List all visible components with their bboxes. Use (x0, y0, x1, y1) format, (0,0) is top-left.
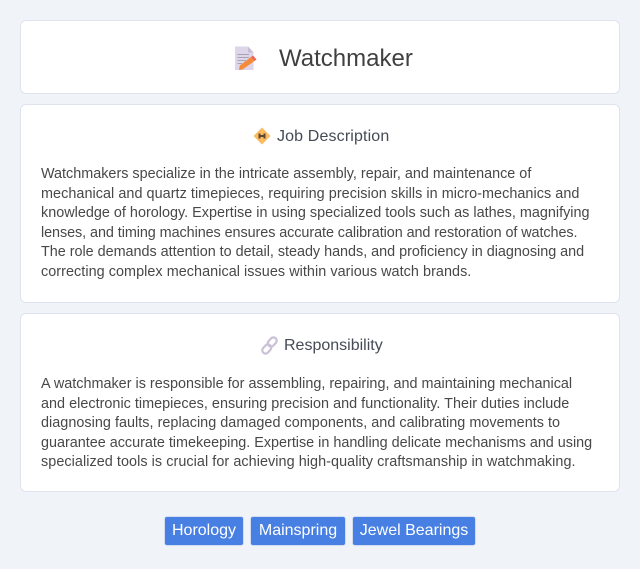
tag: Jewel Bearings: Jewel Bearings (360, 522, 468, 539)
icon: document with pencil (235, 46, 256, 70)
panel: job description (20, 104, 620, 303)
icon: diamond sign (254, 128, 270, 144)
text: job description: Watchmakers specialize in the intricate assembly, repair, and maintenance of (41, 166, 531, 182)
text: job description: knowledge of horology. Expertise in using specialized tools such as lathes, magnifying (41, 205, 590, 221)
text: responsibility: and electronic timepieces, ensuring precision and functionality. Their duties include (41, 396, 569, 412)
text: job description: mechanical and quartz timepieces, requiring precision skills in micro-mechanics and (41, 186, 579, 202)
tag: Mainspring: Mainspring (259, 522, 337, 539)
tag: Jewel Bearings (352, 516, 476, 546)
text: job description (41, 166, 590, 280)
text: responsibility (41, 376, 592, 470)
panel: responsibility (20, 313, 620, 492)
icon: link (261, 336, 278, 355)
text: job description: correcting complex mechanical issues within various watch brands. (41, 264, 471, 280)
text: responsibility: guarantee accurate timekeeping. Expertise in handling delicate mechanisms and using (41, 435, 592, 451)
title: Watchmaker (279, 45, 413, 72)
tag: Horology (164, 516, 244, 546)
tag: Mainspring (250, 516, 346, 546)
tag: Horology: Horology (172, 522, 236, 539)
heading: job description: Job Description (277, 128, 389, 145)
panel: title card (20, 20, 620, 94)
text: job description: lenses, and timing machines ensures accurate calibration and restoration of watches. (41, 225, 577, 241)
text: responsibility: A watchmaker is responsible for assembling, repairing, and maintaining mechanical (41, 376, 572, 392)
text: responsibility: diagnosing faults, replacing damaged components, and calibrating movements to (41, 415, 560, 431)
text: job description: The role demands attention to detail, steady hands, and proficiency in diagnosing and (41, 244, 584, 260)
text: responsibility: specialized tools is crucial for achieving high-quality craftsmanship in watchmaking. (41, 454, 576, 470)
heading: responsibility: Responsibility (284, 337, 383, 354)
